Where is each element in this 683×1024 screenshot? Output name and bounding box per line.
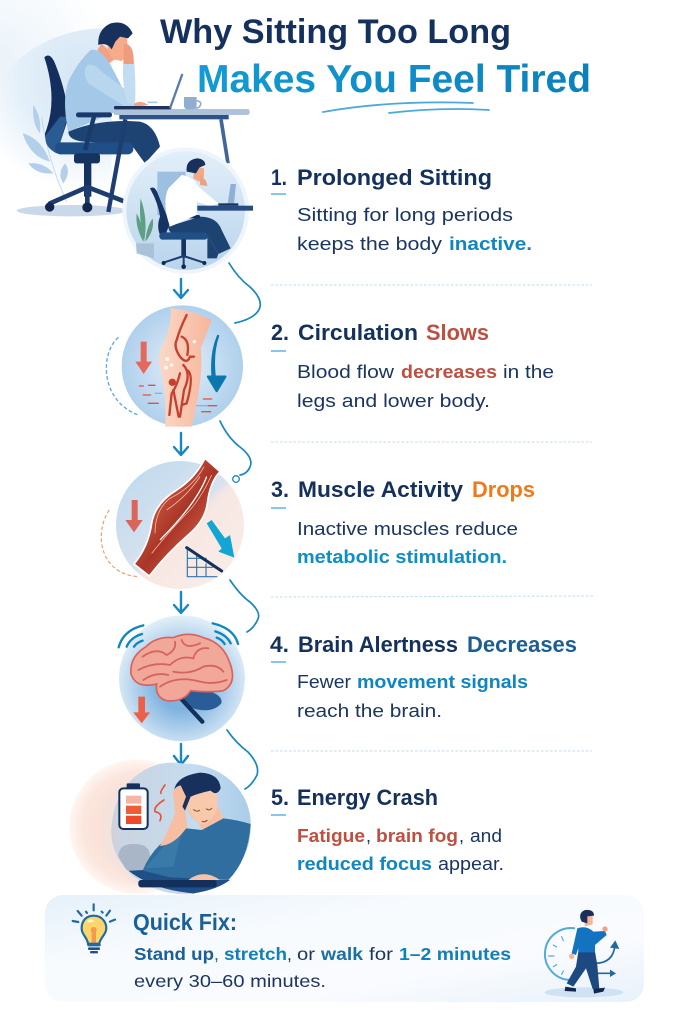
icon: walking person with clock bbox=[545, 910, 623, 997]
step 1 text: Sitting for long periods bbox=[297, 205, 513, 225]
step 2 text: Slows bbox=[426, 320, 489, 345]
quick fix heading: Quick Fix: bbox=[133, 909, 237, 935]
quick fix text: , bbox=[287, 944, 292, 964]
step 4 text: Decreases bbox=[467, 632, 577, 657]
step 4 text: reach the brain. bbox=[297, 701, 442, 721]
step 4 text: 4. bbox=[270, 632, 289, 657]
step 5 text: , bbox=[459, 826, 464, 846]
step 3 text: metabolic stimulation. bbox=[297, 547, 507, 567]
step 1 text: keeps the body bbox=[297, 234, 442, 254]
quick fix text: every 30–60 minutes. bbox=[134, 971, 326, 991]
quick fix text: , bbox=[214, 944, 219, 964]
step 3 text: 3. bbox=[271, 477, 289, 502]
step 5 illustration: tired man with low battery bbox=[69, 759, 251, 894]
step 3 illustration: muscle bbox=[101, 458, 244, 589]
step 4 text: movement signals bbox=[357, 672, 528, 692]
step 4 text: Fewer bbox=[297, 672, 351, 692]
quick fix text bbox=[134, 944, 511, 991]
step 4 text bbox=[270, 632, 577, 721]
step 1 text bbox=[271, 165, 532, 254]
step 2 illustration: leg circulation bbox=[106, 305, 243, 427]
step 1 text: Prolonged Sitting bbox=[297, 165, 492, 190]
title underline bbox=[323, 102, 489, 113]
hero illustration: man at desk bbox=[0, 0, 250, 216]
step 3 text: Inactive muscles reduce bbox=[297, 519, 518, 539]
step 2 text: legs and lower body. bbox=[297, 391, 490, 411]
connector 2 bbox=[220, 421, 251, 475]
step 5 text: 5. bbox=[271, 785, 289, 810]
arrow 3 to 4 bbox=[174, 592, 188, 613]
quick fix text: for bbox=[369, 944, 393, 964]
icon: light bulb bbox=[73, 904, 115, 953]
step 3 text: Drops bbox=[472, 477, 535, 502]
connector 1 bbox=[229, 263, 260, 323]
connector 3 bbox=[230, 580, 259, 632]
step 5 text: Energy Crash bbox=[297, 785, 438, 810]
step 2 text: decreases bbox=[401, 362, 497, 382]
step 2 text: Blood flow bbox=[297, 362, 395, 382]
connector 4 bbox=[227, 730, 258, 789]
quick fix text: or bbox=[297, 944, 315, 964]
step 2 text: in the bbox=[503, 362, 554, 382]
arrow 1 to 2 bbox=[174, 279, 188, 298]
step 5 text: appear. bbox=[438, 854, 504, 874]
step 5 text: reduced focus bbox=[297, 854, 432, 874]
panel: quick fix bbox=[45, 895, 644, 1002]
step 3 text: Muscle Activity bbox=[298, 477, 464, 502]
step 1 text: inactive. bbox=[449, 234, 532, 254]
step 1 text: 1. bbox=[271, 165, 287, 190]
step 2 text: 2. bbox=[271, 320, 289, 345]
title: Why Sitting Too Long bbox=[160, 13, 511, 51]
step 4 text: Brain Alertness bbox=[298, 632, 458, 657]
quick fix text: Stand up bbox=[134, 944, 214, 964]
step 4 illustration: brain bbox=[119, 615, 245, 741]
step 2 text bbox=[271, 320, 554, 411]
step 3 text bbox=[271, 477, 535, 567]
step 2 text: Circulation bbox=[298, 320, 418, 345]
arrow 2 to 3 bbox=[174, 433, 188, 455]
title bbox=[160, 13, 591, 101]
step dividers bbox=[271, 285, 594, 751]
step 5 text bbox=[271, 785, 504, 874]
step 5 text: brain fog bbox=[376, 826, 458, 846]
quick fix text: walk bbox=[320, 944, 363, 964]
title: Makes You Feel Tired bbox=[197, 58, 591, 101]
step 5 text: , bbox=[366, 826, 371, 846]
quick fix text: 1–2 minutes bbox=[399, 944, 511, 964]
step 5 text: and bbox=[470, 826, 502, 846]
step 5 text: Fatigue bbox=[297, 826, 365, 846]
arrow 4 to 5 bbox=[174, 744, 188, 765]
quick fix text: stretch bbox=[224, 944, 287, 964]
step 1 illustration: man at desk in circle bbox=[122, 147, 253, 274]
